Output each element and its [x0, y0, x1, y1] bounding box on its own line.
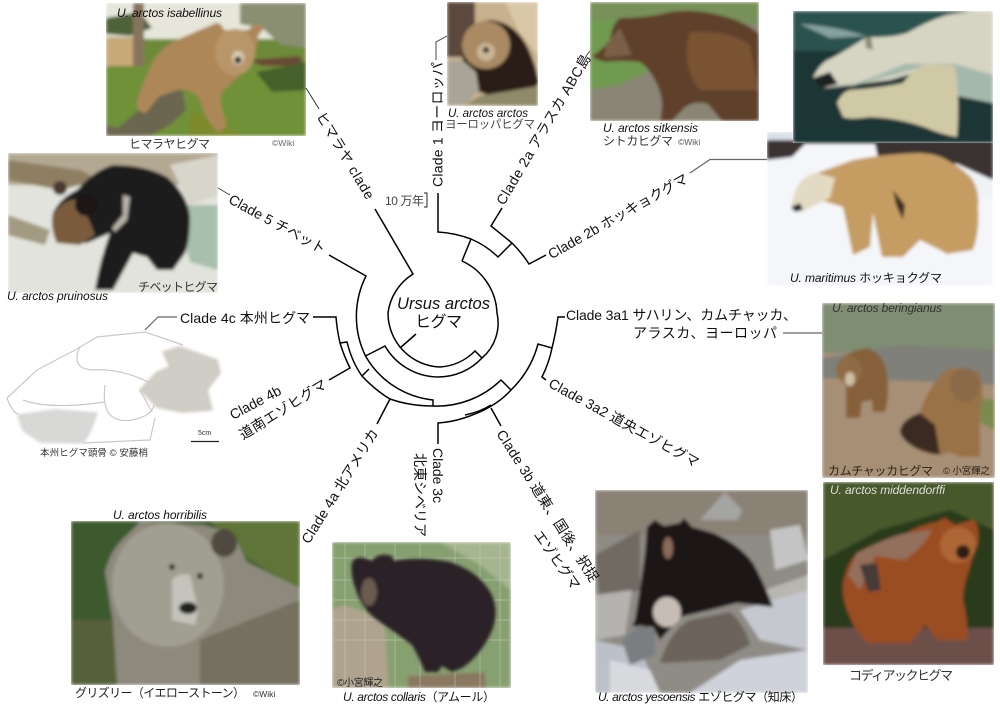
caption: isabellinus [117, 6, 294, 151]
caption: sitkensis: ©Wiki [678, 137, 700, 147]
caption: maritimus: U. maritimus ホッキョクグマ [790, 271, 942, 285]
caption: pruinosus [7, 280, 218, 303]
photo: U. arctos collaris [332, 542, 511, 688]
caption: horribilis: U. arctos horribilis [113, 508, 207, 522]
label: Clade 2a: Clade 2a アラスカ ABC島 [493, 51, 594, 208]
caption: isabellinus: U. arctos isabellinus [117, 6, 222, 20]
center title: Ursus arctos [397, 295, 490, 313]
caption: collaris: ©小宮輝之 [337, 676, 383, 689]
label: Clade 4b: Clade 4b [227, 382, 284, 423]
skull figure [7, 332, 220, 459]
label: Clade 3a2: Clade 3a2 道央エゾヒグマ [546, 375, 702, 470]
label: Clade 4b: 道南エゾヒグマ [236, 376, 329, 443]
caption: horribilis: ©Wiki [253, 689, 275, 699]
caption: arctos: ヨーロッパヒグマ [445, 117, 535, 131]
scale label: 10 万年: 10 万年 [385, 194, 424, 208]
caption: middendorffi [830, 483, 953, 683]
photo: U. arctos pruinosus [8, 153, 218, 293]
photo: U. arctos arctos [447, 2, 538, 106]
photo: U. arctos isabellinus [106, 3, 306, 136]
caption: isabellinus: ©Wiki [272, 138, 294, 148]
caption: yesoensis: U. arctos yesoensis エゾヒグマ（知床） [598, 690, 803, 704]
label: Clade 3a1 [566, 307, 822, 341]
photo: U. maritimus [767, 132, 993, 286]
photo: U. arctos beringianus [822, 303, 995, 478]
caption: collaris: U. arctos collaris（アムール） [343, 690, 495, 704]
caption: sitkensis: U. arctos sitkensis [603, 121, 698, 135]
label: Clade 5: Clade 5 チベット [226, 191, 329, 257]
label: Clade 2b: Clade 2b ホッキョクグマ [545, 170, 690, 262]
caption: horribilis: グリズリー（イエローストーン） [75, 685, 245, 700]
caption: beringianus: U. arctos beringianus [832, 301, 942, 315]
caption: pruinosus: U. arctos pruinosus [7, 289, 108, 303]
caption: beringianus: カムチャッカヒグマ [828, 464, 933, 478]
photo: U. arctos sitkensis [590, 2, 759, 121]
caption: middendorffi: U. arctos middendorffi [830, 483, 945, 497]
caption: beringianus [828, 301, 990, 478]
photo: U. arctos horribilis [71, 521, 300, 685]
skull bone: mandible [18, 410, 97, 443]
label: Clade 3b: Clade 3b 道東、国後、択捉 [493, 427, 602, 585]
caption: arctos: U. arctos arctos [448, 108, 528, 120]
label: Clade 3b: エゾヒグマ [531, 527, 584, 593]
center title: ヒグマ [415, 313, 462, 331]
phylogenetic tree [313, 193, 565, 444]
label: Clade 4a: Clade 4a 北アメリカ [298, 426, 381, 546]
photo: U. arctos middendorffi [823, 482, 994, 665]
scale bar [191, 430, 219, 442]
caption: beringianus: © 小宮輝之 [943, 465, 990, 477]
label: Clade 4c [145, 310, 310, 330]
caption: pruinosus: チベットヒグマ [138, 280, 218, 294]
caption: isabellinus: ヒマラヤヒグマ [129, 137, 210, 151]
caption: sitkensis: シトカヒグマ [603, 134, 673, 148]
caption: middendorffi: コディアックヒグマ [849, 668, 953, 683]
photo: U. arctos yesoensis [595, 490, 808, 693]
label: Clade 3c: 北東シベリア [412, 453, 428, 537]
skull bone: braincase [140, 347, 220, 412]
caption: collaris [337, 676, 495, 704]
label: Clade 3c: Clade 3c [430, 448, 446, 503]
label: Clade 3a1: アラスカ、ヨーロッパ [633, 325, 777, 341]
skull outline [7, 332, 183, 443]
center title [397, 295, 490, 331]
caption: horribilis [75, 508, 275, 700]
scale bar: 5cm [198, 430, 211, 437]
label: Clade 3a1: Clade 3a1 サハリン、カムチャッカ、 [566, 307, 797, 323]
label: Himalaya clade: ヒマラヤ clade [313, 109, 378, 202]
label: Clade 3c [412, 448, 446, 537]
caption: arctos [445, 108, 535, 131]
label: Clade 4c: Clade 4c 本州ヒグマ [180, 310, 310, 326]
label: Clade 1: Clade 1 ヨーロッパ [430, 62, 446, 187]
label: Clade 2b [545, 160, 767, 262]
caption: sitkensis [603, 121, 700, 148]
photo: polar bear swimming [793, 11, 993, 143]
skull caption: 本州ヒグマ頭骨 © 安藤梢 [40, 447, 148, 459]
